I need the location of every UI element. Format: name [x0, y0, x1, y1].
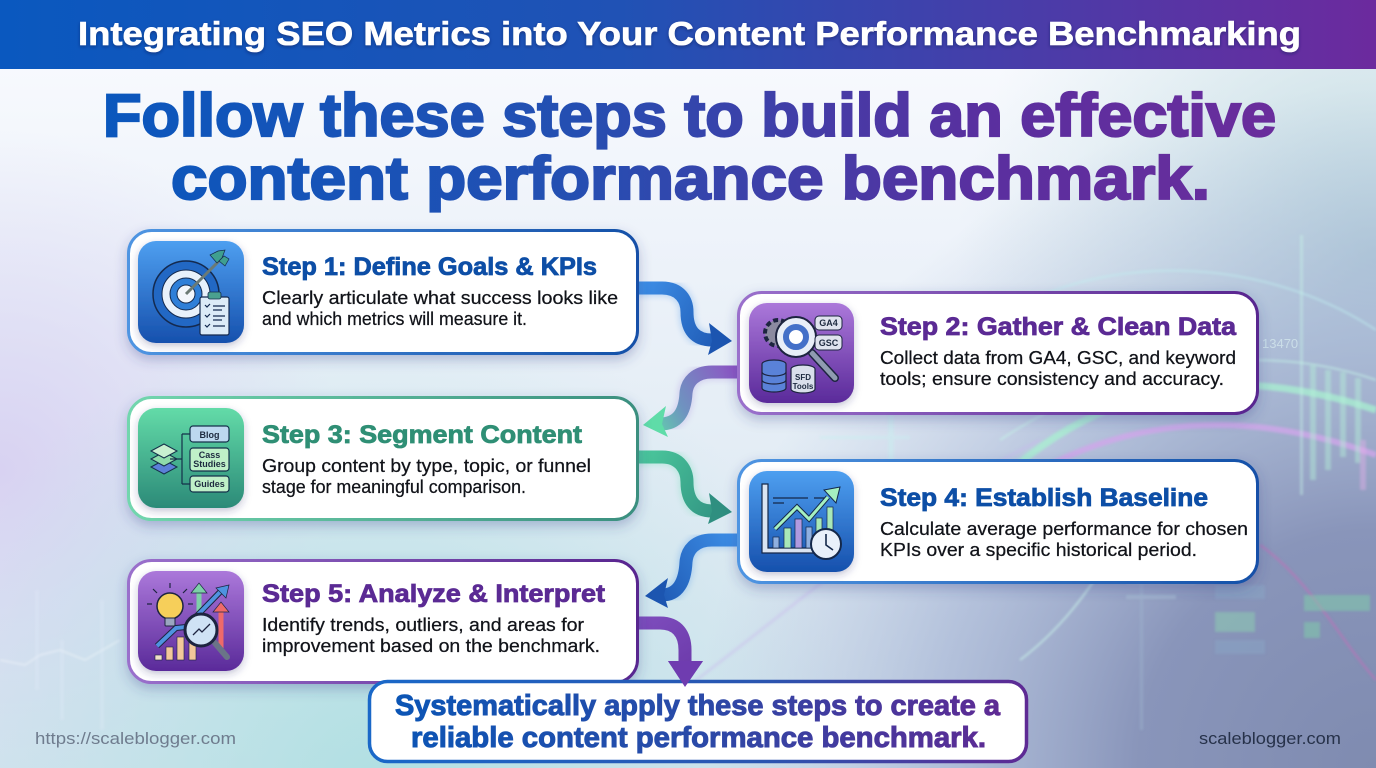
summary text: Systematically apply these steps to create a: [395, 690, 1001, 722]
icon: baseline chart and clock: [749, 471, 854, 572]
panel: step 1: [128, 230, 638, 354]
icon: gears, data and magnifier: Tools: [793, 382, 814, 391]
step 5 heading: Step 5: Analyze & Interpret: [262, 580, 606, 608]
step 1 heading: Step 1: Define Goals & KPIs: [262, 253, 597, 281]
icon: content layers and categories: [138, 408, 244, 508]
footer url left: https://scaleblogger.com: [35, 729, 236, 748]
step 1 description: and which metrics will measure it.: [262, 308, 527, 329]
step 3 description: Group content by type, topic, or funnel: [262, 455, 591, 476]
step 4 heading: Step 4: Establish Baseline: [880, 484, 1208, 512]
arrow: step 5 to summary: [636, 623, 703, 687]
icon: gears, data and magnifier: GSC: [819, 338, 839, 348]
arrow: step 2 to step 3: [643, 372, 740, 437]
main heading: [103, 82, 1276, 212]
main heading: Follow these steps to build an effective: [103, 82, 1276, 149]
arrow: step 4 to step 5: [645, 540, 740, 608]
step 4 description: KPIs over a specific historical period.: [880, 539, 1197, 560]
step 2 description: Collect data from GA4, GSC, and keyword: [880, 347, 1236, 368]
main heading: content performance benchmark.: [171, 145, 1210, 212]
step 5 description: improvement based on the benchmark.: [262, 635, 600, 656]
background: 13470: [1262, 336, 1298, 351]
arrow: step 1 to step 2: [636, 288, 732, 355]
step 2 heading: Step 2: Gather & Clean Data: [880, 313, 1237, 341]
summary text: [395, 690, 1001, 754]
icon: content layers and categories: Studies: [193, 459, 226, 469]
step 4 description: [880, 518, 1248, 560]
icon: gears, data and magnifier: GA4: [819, 318, 838, 328]
banner title: Integrating SEO Metrics into Your Content Performance Benchmarking: [78, 15, 1301, 52]
step 5 description: Identify trends, outliers, and areas for: [262, 614, 584, 635]
summary text: reliable content performance benchmark.: [411, 722, 986, 754]
step 1 description: Clearly articulate what success looks like: [262, 287, 618, 308]
icon: gears, data and magnifier: [749, 303, 854, 403]
panel: step 2: [738, 292, 1258, 414]
icon: content layers and categories: Blog: [200, 430, 220, 440]
panel: summary callout: [370, 682, 1026, 762]
arrow tip over summary: [668, 661, 703, 687]
icon: content layers and categories: Guides: [194, 479, 225, 489]
icon: content layers and categories: Cass: [199, 450, 220, 460]
step 2 description: tools; ensure consistency and accuracy.: [880, 368, 1224, 389]
icon: gears, data and magnifier: SFD: [795, 373, 811, 382]
step 3 heading: Step 3: Segment Content: [262, 421, 583, 449]
arrow: step 3 to step 4: [636, 457, 732, 524]
icon: idea, growth and analysis: [138, 571, 244, 671]
icon: target and checklist: [138, 241, 244, 343]
panel: step 3: [128, 398, 638, 520]
panel: step 4: [738, 460, 1258, 582]
step 2 description: [880, 347, 1236, 389]
header banner: [0, 0, 1376, 69]
panel: step 5: [128, 560, 638, 682]
step 3 description: stage for meaningful comparison.: [262, 476, 526, 497]
step 4 description: Calculate average performance for chosen: [880, 518, 1248, 539]
step 3 description: [262, 455, 591, 497]
footer brand right: scaleblogger.com: [1199, 729, 1341, 748]
step 1 description: [262, 287, 618, 329]
step 5 description: [262, 614, 600, 656]
